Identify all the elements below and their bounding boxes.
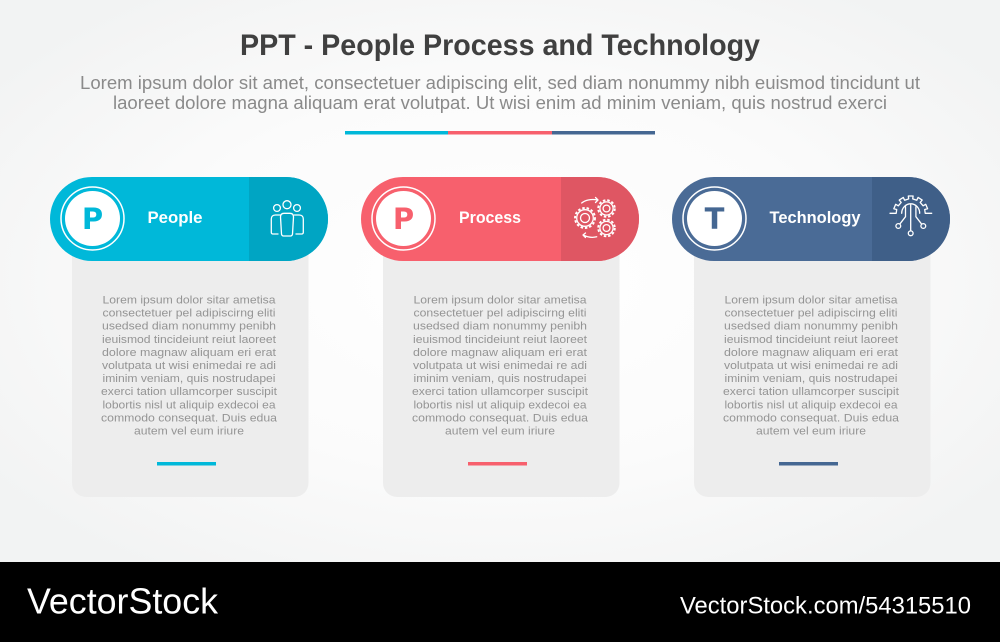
body text: technology: volutpata ut wisi enimedai re adi — [724, 360, 898, 372]
subtitle text: laoreet dolore magna aliquam erat volutpat. Ut wisi enim ad minim veniam, quis nostrud exerci — [113, 93, 887, 113]
body card: technology — [694, 240, 930, 497]
header pill: people — [50, 177, 328, 261]
header pill: process — [361, 177, 639, 261]
body text: technology: consectetuer pel adipiscirng eliti — [724, 308, 898, 320]
icon: gears with arrows — [575, 198, 615, 238]
header pill: process: P — [393, 202, 414, 236]
header pill: technology: T — [705, 202, 725, 236]
body text: process: ieuismod tincideiunt reiut laoreet — [413, 334, 588, 346]
body text: technology: autem vel eum iriure — [756, 426, 866, 438]
body text: process — [412, 294, 589, 438]
header pill: technology: Technology — [770, 208, 861, 227]
title: PPT - People Process and Technology — [240, 29, 760, 62]
footer brand: VectorStock — [27, 580, 219, 622]
body text: process: volutpata ut wisi enimedai re adi — [413, 360, 587, 372]
accent bar: people — [157, 462, 216, 466]
body text: process: autem vel eum iriure — [445, 426, 555, 438]
panel: process — [361, 177, 639, 497]
body text: people: lobortis nisl ut aliquip exdecoi ea — [102, 399, 276, 411]
body text: technology — [723, 294, 900, 438]
subtitle text — [80, 73, 920, 113]
body text: process: dolore magnaw aliquam eri erat — [413, 347, 588, 359]
body text: technology: exerci tation ullamcorper suscipit — [723, 386, 900, 398]
body text: process: iminim veniam, quis nostrudapei — [414, 373, 586, 385]
body text: process: usedsed diam nonummy penibh — [413, 321, 587, 333]
body card: people — [72, 240, 308, 497]
body text: people: commodo consequat. Duis edua — [101, 412, 278, 424]
panel: technology — [672, 177, 950, 497]
body text: technology: Lorem ipsum dolor sitar ametisa — [724, 294, 898, 306]
header pill: process: Process — [459, 208, 521, 227]
body text: technology: lobortis nisl ut aliquip exdecoi ea — [724, 399, 898, 411]
body text: process: lobortis nisl ut aliquip exdecoi ea — [414, 399, 587, 411]
body text: process: exerci tation ullamcorper suscipit — [412, 386, 589, 398]
footer image id: VectorStock.com/54315510 — [680, 592, 971, 620]
body text: people: Lorem ipsum dolor sitar ametisa — [102, 294, 276, 306]
body text: people: usedsed diam nonummy penibh — [102, 321, 276, 333]
header pill: people: P — [82, 202, 103, 236]
body text: people: consectetuer pel adipiscirng eliti — [102, 308, 276, 320]
subtitle text: Lorem ipsum dolor sit amet, consectetuer adipiscing elit, sed diam nonummy nibh euismod tincidunt ut — [80, 73, 920, 93]
body text: people: dolore magnaw aliquam eri erat — [102, 347, 277, 359]
body text: technology: commodo consequat. Duis edua — [723, 412, 900, 424]
body text: people: exerci tation ullamcorper suscipit — [101, 386, 278, 398]
body text: process: consectetuer pel adipiscirng eliti — [414, 308, 586, 320]
body text: process: commodo consequat. Duis edua — [412, 412, 589, 424]
body text: technology: usedsed diam nonummy penibh — [724, 321, 898, 333]
accent bar: process — [468, 462, 527, 466]
body text: technology: ieuismod tincideiunt reiut laoreet — [724, 334, 899, 346]
panel: people — [50, 177, 328, 497]
body text: people — [101, 294, 278, 438]
header pill: technology — [672, 177, 950, 261]
body text: people: iminim veniam, quis nostrudapei — [102, 373, 276, 385]
body text: process: Lorem ipsum dolor sitar ametisa — [414, 294, 587, 306]
body text: people: volutpata ut wisi enimedai re adi — [102, 360, 276, 372]
body text: people: autem vel eum iriure — [134, 426, 244, 438]
header pill: people: People — [148, 208, 202, 227]
body text: people: ieuismod tincideiunt reiut laoreet — [102, 334, 277, 346]
icon: people group — [271, 201, 303, 236]
accent bar: technology — [779, 462, 838, 466]
body text: technology: dolore magnaw aliquam eri erat — [724, 347, 899, 359]
body card: process — [383, 240, 620, 497]
footer band — [0, 562, 1000, 642]
icon: gear circuit — [890, 196, 932, 236]
tri-colour divider — [345, 131, 655, 134]
body text: technology: iminim veniam, quis nostrudapei — [724, 373, 898, 385]
